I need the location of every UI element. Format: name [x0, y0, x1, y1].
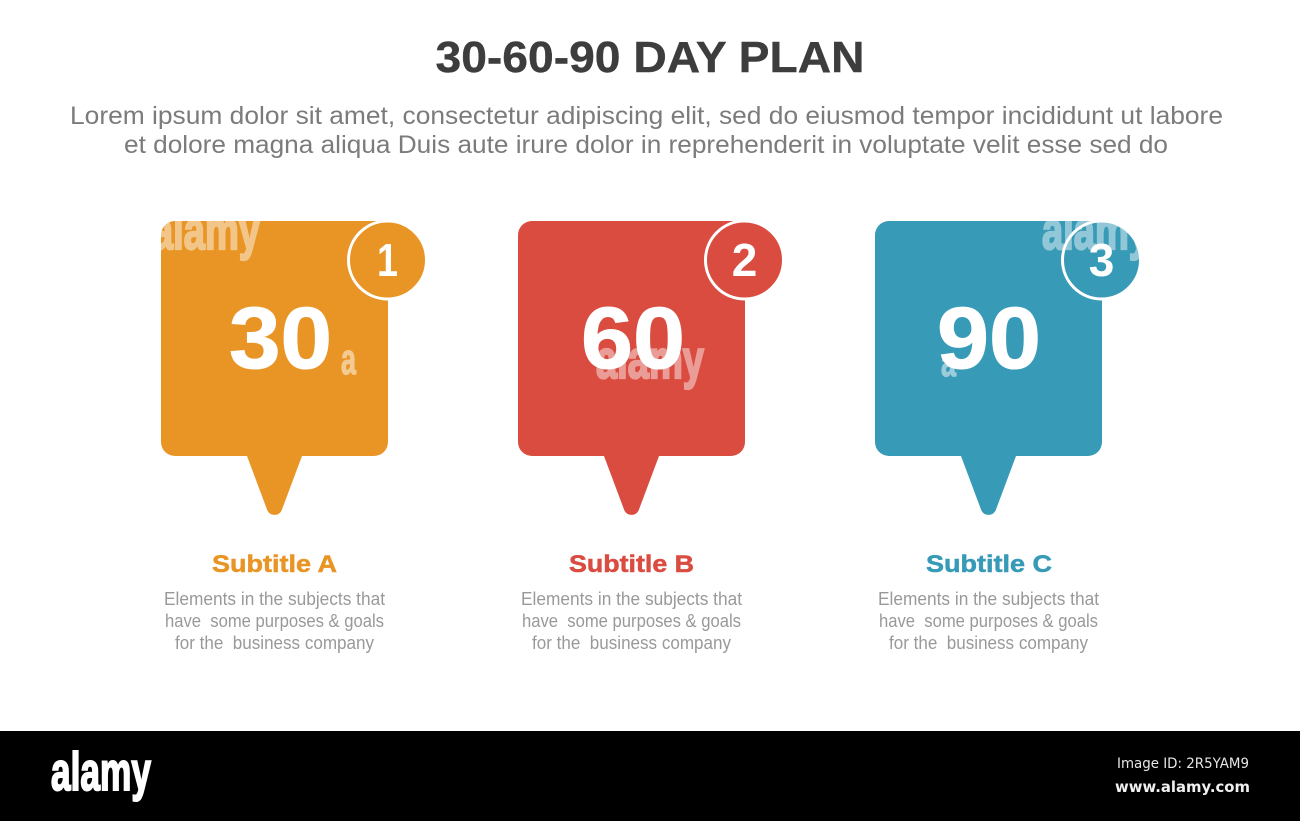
intro text block	[70, 102, 1223, 159]
badge 2: 2	[732, 234, 757, 286]
description C: Elements in the subjects that	[878, 589, 1099, 609]
description C: for the business company	[889, 633, 1088, 653]
badge 3	[1062, 221, 1140, 299]
subtitle A: Subtitle A	[212, 551, 337, 578]
badge 1	[348, 221, 426, 299]
website: www.alamy.com	[1115, 778, 1250, 796]
speech bubble: red	[518, 221, 745, 515]
badge number 3: 3	[1089, 234, 1114, 286]
intro text block: et dolore magna aliqua Duis aute irure dolor in reprehenderit in voluptate velit esse sed do	[124, 131, 1168, 159]
badge 2	[706, 221, 784, 299]
badge 1: 1	[377, 234, 398, 286]
number 90: 90	[937, 290, 1041, 387]
panel: 30 days	[152, 201, 426, 653]
description B: for the business company	[532, 633, 731, 653]
watermark over red bubble: alamy	[596, 330, 704, 390]
description A: have some purposes & goals	[165, 611, 384, 631]
panel: 90 days	[875, 201, 1150, 653]
watermark over orange bubble: alamy	[152, 201, 260, 261]
footer bar	[0, 731, 1300, 821]
speech bubble: blue	[875, 221, 1102, 515]
number 60: 60	[581, 290, 685, 387]
description A: for the business company	[175, 633, 374, 653]
description B: have some purposes & goals	[522, 611, 741, 631]
footer logo: alamy	[51, 742, 151, 802]
description C: have some purposes & goals	[879, 611, 1098, 631]
description A: Elements in the subjects that	[164, 589, 385, 609]
description C	[878, 589, 1099, 653]
subtitle B: Subtitle B	[569, 551, 694, 578]
subtitle C: Subtitle C	[926, 551, 1052, 578]
intro text block: Lorem ipsum dolor sit amet, consectetur adipiscing elit, sed do eiusmod tempor incididunt ut labore	[70, 102, 1223, 130]
title: 30-60-90 DAY PLAN	[436, 33, 864, 82]
description A	[164, 589, 385, 653]
watermark letter behind number 90: a	[941, 341, 957, 385]
description B	[521, 589, 742, 653]
description B: Elements in the subjects that	[521, 589, 742, 609]
number 30: 30	[229, 290, 332, 387]
watermark letter beside number 30: a	[341, 335, 356, 384]
panel: 60 days	[518, 221, 784, 653]
speech bubble: orange	[161, 221, 388, 515]
image id: Image ID: 2R5YAM9	[1117, 756, 1249, 772]
watermark over blue bubble: alamy	[1042, 201, 1150, 261]
